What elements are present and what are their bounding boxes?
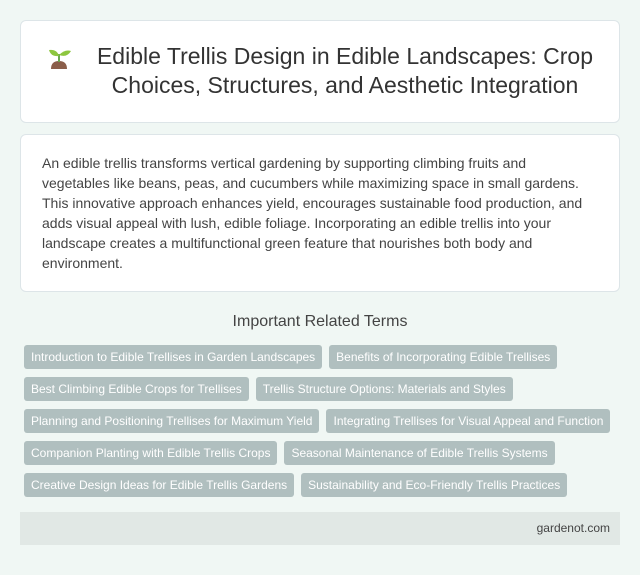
footer: gardenot.com [537,521,610,535]
tags: Trellis Structure Options: Materials and Styles [263,382,506,396]
tags: Companion Planting with Edible Trellis Crops [31,446,270,460]
tags: Best Climbing Edible Crops for Trellises [31,382,242,396]
tags: Creative Design Ideas for Edible Trellis Gardens [31,478,287,492]
tags [24,345,610,497]
icon: seedling [49,50,71,69]
section heading: Important Related Terms [233,313,407,330]
description card [20,134,620,292]
title card [20,20,620,123]
footer [20,512,620,545]
description text: An edible trellis transforms vertical gardening by supporting climbing fruits and [42,155,526,171]
description text: adds visual appeal with lush, edible foliage. Incorporating an edible trellis into your [42,215,551,231]
description text [42,155,582,271]
description text: This innovative approach enhances yield, encourages sustainable food production, and [42,195,582,211]
tags: Seasonal Maintenance of Edible Trellis Systems [291,446,548,460]
tags: Introduction to Edible Trellises in Garden Landscapes [31,350,315,364]
tags: Planning and Positioning Trellises for Maximum Yield [31,414,312,428]
description text: landscape creates a multifunctional green feature that nourishes both body and [42,235,532,251]
tags: Integrating Trellises for Visual Appeal and Function [333,414,603,428]
description text: environment. [42,255,123,271]
description text: vegetables like beans, peas, and cucumbers while maximizing space in small gardens. [42,175,579,191]
tags: Sustainability and Eco-Friendly Trellis Practices [308,478,560,492]
title: Edible Trellis Design in Edible Landscapes: Crop Choices, Structures, and Aesthetic Integration [97,43,593,98]
tags: Benefits of Incorporating Edible Trellises [336,350,550,364]
